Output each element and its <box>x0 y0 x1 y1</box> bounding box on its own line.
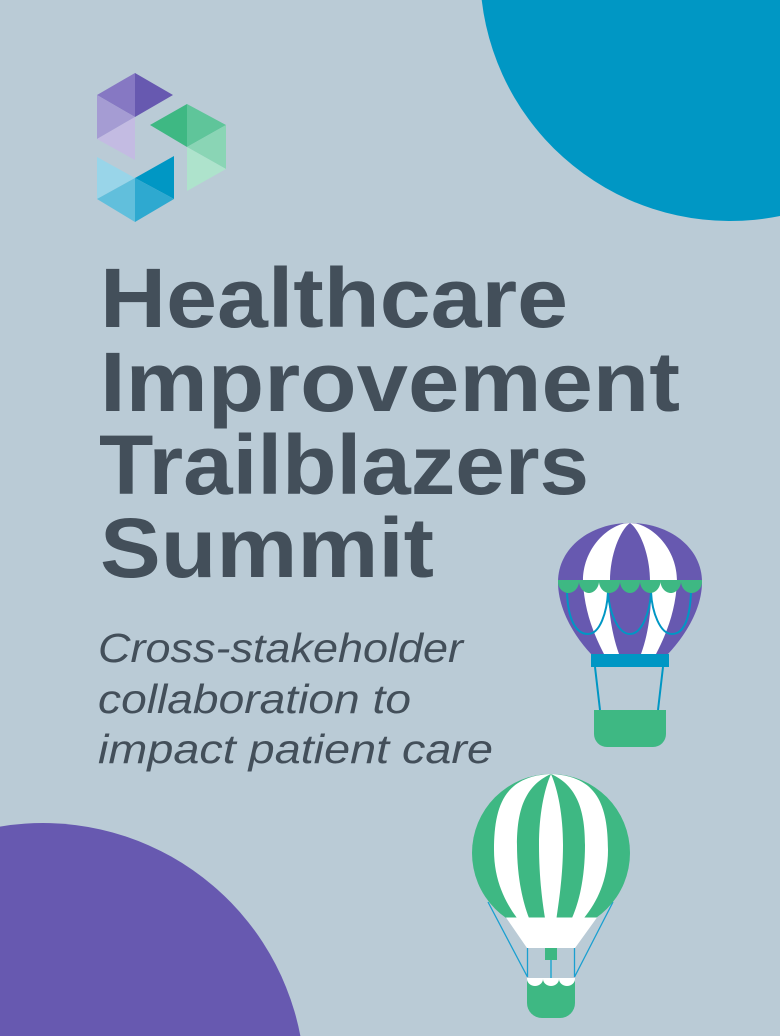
title: Summit <box>100 501 434 595</box>
title <box>99 251 680 595</box>
icon: green hot air balloon <box>472 774 630 1018</box>
subtitle: Cross-stakeholder <box>98 625 466 671</box>
icon: purple hot air balloon <box>558 523 702 747</box>
subtitle: impact patient care <box>98 726 493 772</box>
subtitle <box>98 625 493 772</box>
title: Improvement <box>100 335 680 429</box>
title: Trailblazers <box>99 418 589 512</box>
decorative circle: top right blue <box>482 0 780 221</box>
icon: hexagon logo <box>97 73 226 222</box>
decorative circle: bottom left purple <box>0 823 300 1036</box>
title: Healthcare <box>100 251 568 345</box>
subtitle: collaboration to <box>98 676 411 722</box>
